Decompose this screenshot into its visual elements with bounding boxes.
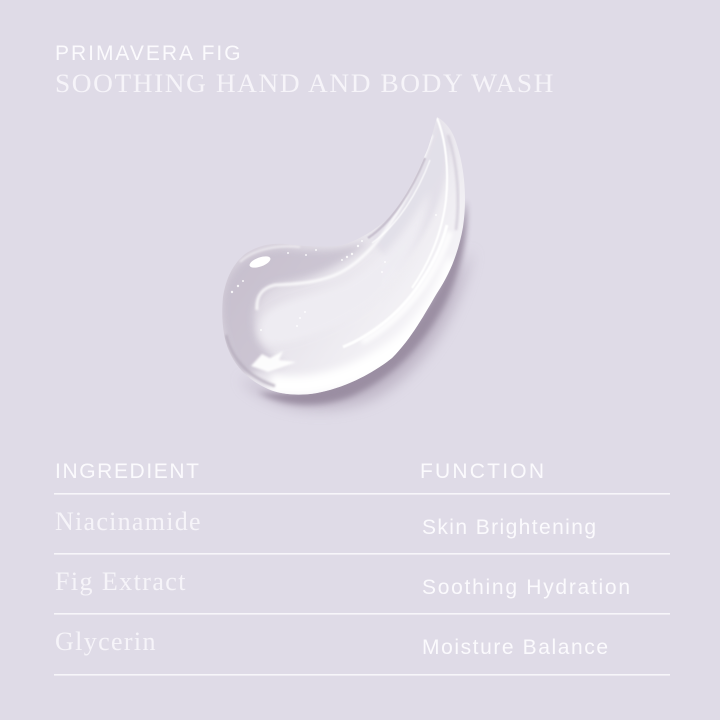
upper edge streak xyxy=(368,158,425,238)
tail rim line xyxy=(412,118,447,288)
ingredient table xyxy=(54,460,670,676)
bottom white band xyxy=(270,262,456,386)
product name: SOOTHING HAND AND BODY WASH xyxy=(55,69,555,98)
row: glycerin xyxy=(55,627,609,659)
gel swatch illustration xyxy=(222,117,472,409)
row: niacinamide: Skin Brightening xyxy=(422,516,597,539)
title xyxy=(55,42,555,98)
lower left rim xyxy=(226,335,275,386)
row: glycerin: Moisture Balance xyxy=(422,636,609,659)
bubbles xyxy=(231,214,437,331)
row: fig extract: Fig Extract xyxy=(55,567,187,596)
table header: FUNCTION xyxy=(420,460,546,483)
gel interior reflections xyxy=(222,118,458,386)
table header xyxy=(55,460,546,483)
right flowing streak xyxy=(343,225,447,347)
row: niacinamide: Niacinamide xyxy=(55,507,202,536)
row: fig extract: Soothing Hydration xyxy=(422,576,631,599)
broad white streak xyxy=(362,232,450,342)
central pool xyxy=(260,208,424,342)
inner swirl highlight xyxy=(257,135,432,310)
row dividers xyxy=(54,493,670,676)
tail tint xyxy=(380,141,447,248)
brand name: PRIMAVERA FIG xyxy=(55,42,242,65)
left rim shading xyxy=(222,240,370,375)
row: niacinamide xyxy=(55,507,597,539)
gel cast shadow xyxy=(240,200,472,409)
row: fig extract xyxy=(55,567,631,599)
right edge shade xyxy=(448,135,458,230)
top rim light xyxy=(240,246,300,262)
bright shard xyxy=(251,351,296,372)
specular highlight xyxy=(248,254,272,270)
row: glycerin: Glycerin xyxy=(55,627,157,656)
tail thin line xyxy=(372,160,430,243)
gel body xyxy=(222,117,465,395)
table header: INGREDIENT xyxy=(55,460,201,483)
